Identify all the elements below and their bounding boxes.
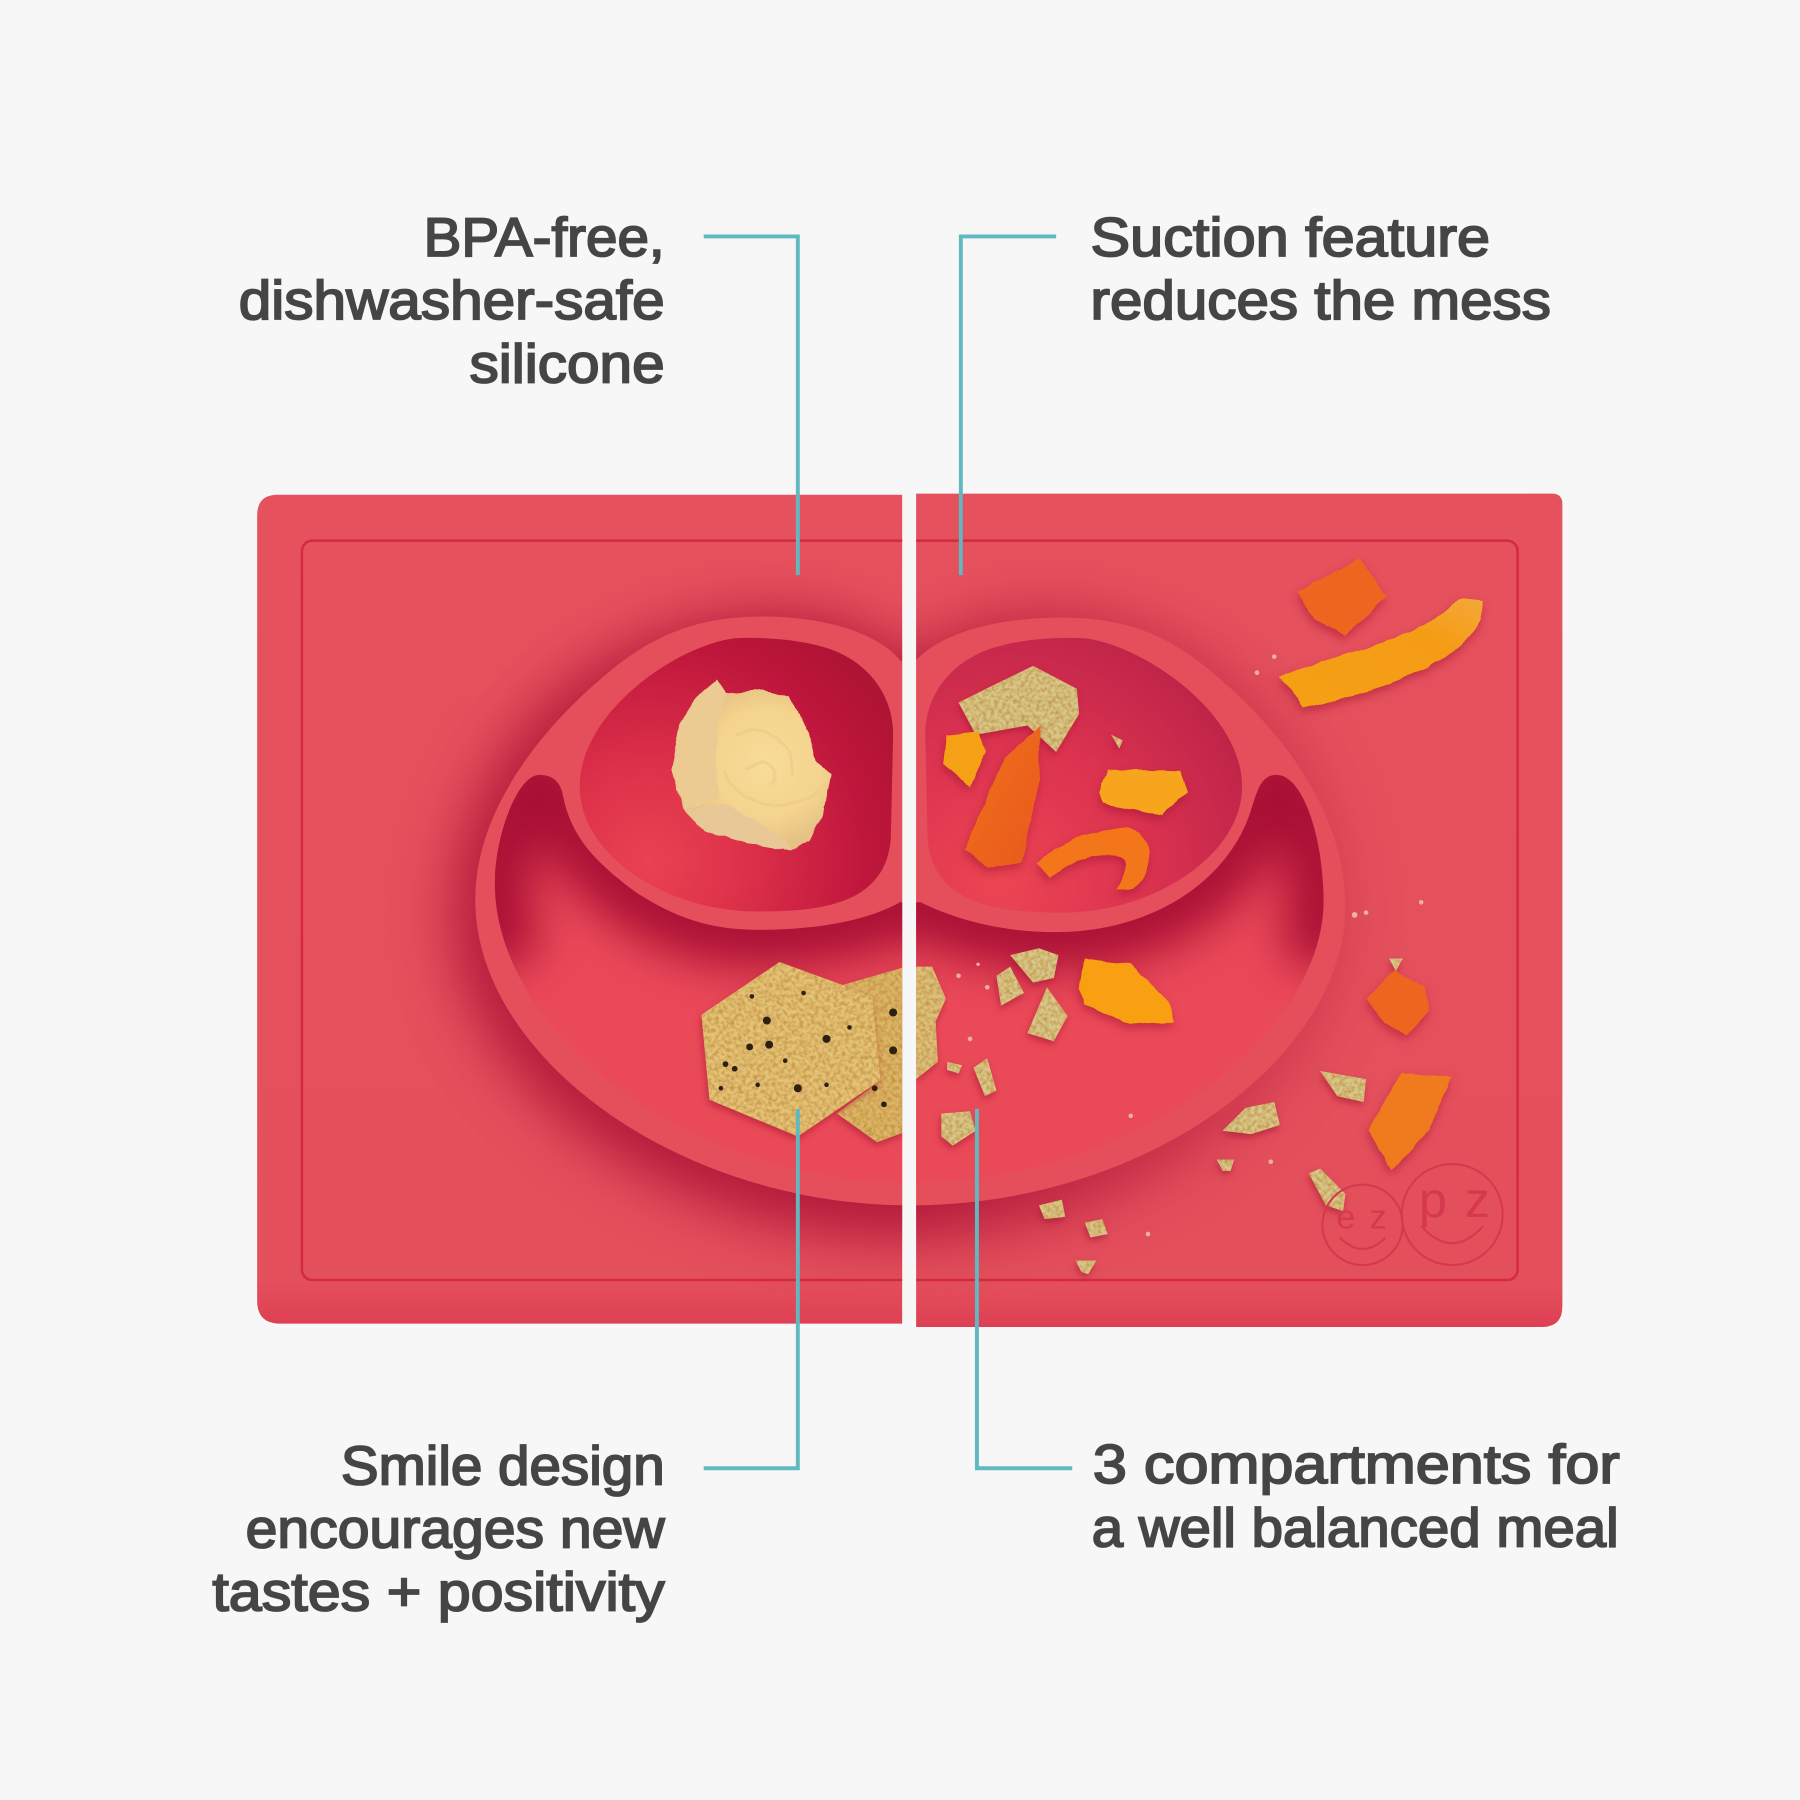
text: silicone callout: dishwasher-safe bbox=[239, 269, 665, 331]
mat left half bbox=[257, 495, 902, 1324]
text: silicone callout bbox=[239, 206, 665, 394]
plate shadow bbox=[452, 614, 1345, 1238]
text: smile design callout: Smile design bbox=[341, 1434, 665, 1496]
smile compartment bbox=[494, 775, 1324, 1008]
connector: suction bbox=[961, 236, 1056, 575]
text: suction callout bbox=[1091, 206, 1551, 331]
connector: compartments bbox=[977, 1109, 1072, 1468]
text: compartments callout: a well balanced meal bbox=[1092, 1496, 1619, 1558]
embossed logo: z bbox=[1465, 1171, 1490, 1228]
cracker front bbox=[701, 962, 880, 1136]
text: smile design callout: tastes + positivity bbox=[212, 1561, 665, 1623]
text: smile design callout bbox=[212, 1434, 665, 1623]
connector: silicone bbox=[704, 236, 798, 575]
cracker seeds bbox=[719, 991, 897, 1107]
right compartment bbox=[925, 638, 1242, 913]
left compartment bbox=[580, 638, 893, 911]
food: hummus bbox=[670, 680, 831, 851]
cracker back right part bbox=[916, 967, 946, 1079]
text: silicone callout: BPA-free, bbox=[424, 206, 665, 268]
text: compartments callout bbox=[1092, 1433, 1620, 1558]
product: smile plate mat bbox=[257, 494, 1562, 1327]
text: smile design callout: encourages new bbox=[246, 1497, 665, 1559]
text: suction callout: Suction feature bbox=[1091, 206, 1490, 268]
food: fine crumb specks bbox=[956, 654, 1423, 1236]
center divider bbox=[902, 482, 916, 1343]
text: compartments callout: 3 compartments for bbox=[1093, 1433, 1620, 1495]
embossed logo: z bbox=[1370, 1198, 1387, 1236]
food: crumbs bbox=[941, 666, 1403, 1274]
food: crackers bbox=[701, 962, 946, 1142]
text: silicone callout: silicone bbox=[470, 332, 665, 394]
food: pepper pieces bbox=[944, 559, 1483, 1171]
embossed logo bbox=[1322, 1164, 1503, 1265]
mat inner groove bbox=[302, 541, 1518, 1280]
infographic canvas bbox=[212, 216, 1620, 1623]
plate rim bbox=[475, 616, 1345, 1205]
embossed logo: e bbox=[1336, 1198, 1355, 1236]
embossed logo: p bbox=[1419, 1171, 1447, 1228]
cracker back left part bbox=[837, 968, 902, 1142]
mat right half bbox=[916, 494, 1562, 1327]
text: suction callout: reduces the mess bbox=[1091, 269, 1551, 331]
connector: smile design bbox=[704, 1109, 798, 1468]
